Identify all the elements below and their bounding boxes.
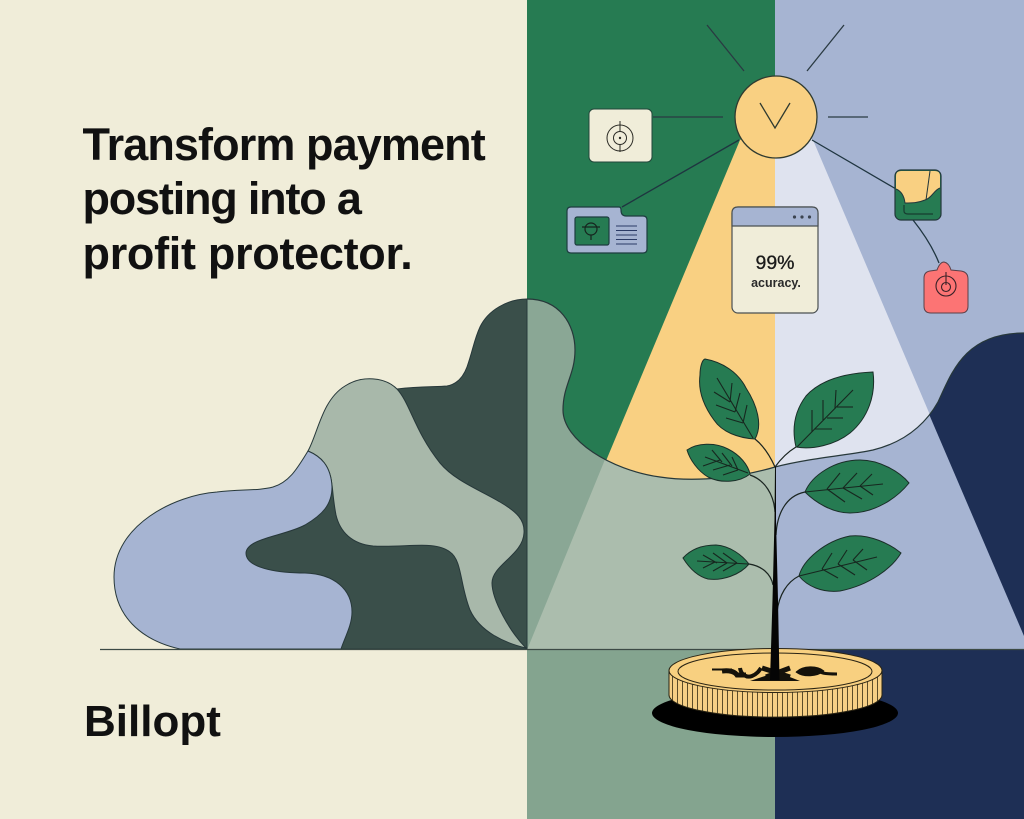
plant branches — [749, 439, 805, 612]
light cone: yellow half — [527, 117, 775, 650]
leaf: right middle — [805, 460, 909, 513]
plant stem — [770, 467, 780, 680]
brand name: Billopt — [84, 697, 221, 746]
light cone: pale half — [775, 117, 1024, 650]
title — [82, 118, 486, 278]
panel: blue background — [775, 0, 1024, 650]
leaf: upper right — [794, 372, 874, 448]
hill: blue — [114, 451, 352, 649]
title: profit protector. — [82, 228, 412, 278]
icon card: chart swatch — [895, 170, 941, 220]
hill outline right — [527, 299, 1024, 479]
icon card: profile file — [567, 207, 647, 253]
ground line — [100, 648, 1024, 650]
sun rays — [653, 25, 868, 117]
icon: coin shadow — [652, 689, 898, 737]
hills: overlay on right panels — [527, 290, 1024, 650]
leaf: lower right — [799, 536, 901, 591]
hill: sage — [308, 379, 526, 648]
title: posting into a — [82, 173, 361, 224]
bottom band left — [527, 650, 775, 819]
panel: green background — [527, 0, 775, 650]
hill: dark green — [240, 299, 527, 649]
browser card: 99% accuracy: 99% — [755, 252, 795, 274]
title: Transform payment — [82, 118, 485, 170]
browser card: 99% accuracy — [732, 207, 818, 313]
leaf: mid left — [687, 444, 750, 481]
icon: sun — [735, 76, 817, 158]
connector lines — [622, 140, 939, 263]
icon: coin — [669, 648, 882, 717]
leaf: lower left — [683, 545, 749, 579]
icon card: target — [589, 109, 652, 162]
leaf: upper left — [700, 359, 759, 439]
icon card: red tag — [924, 262, 968, 313]
browser card: 99% accuracy: acuracy. — [751, 276, 801, 290]
bottom band right — [775, 650, 1024, 819]
